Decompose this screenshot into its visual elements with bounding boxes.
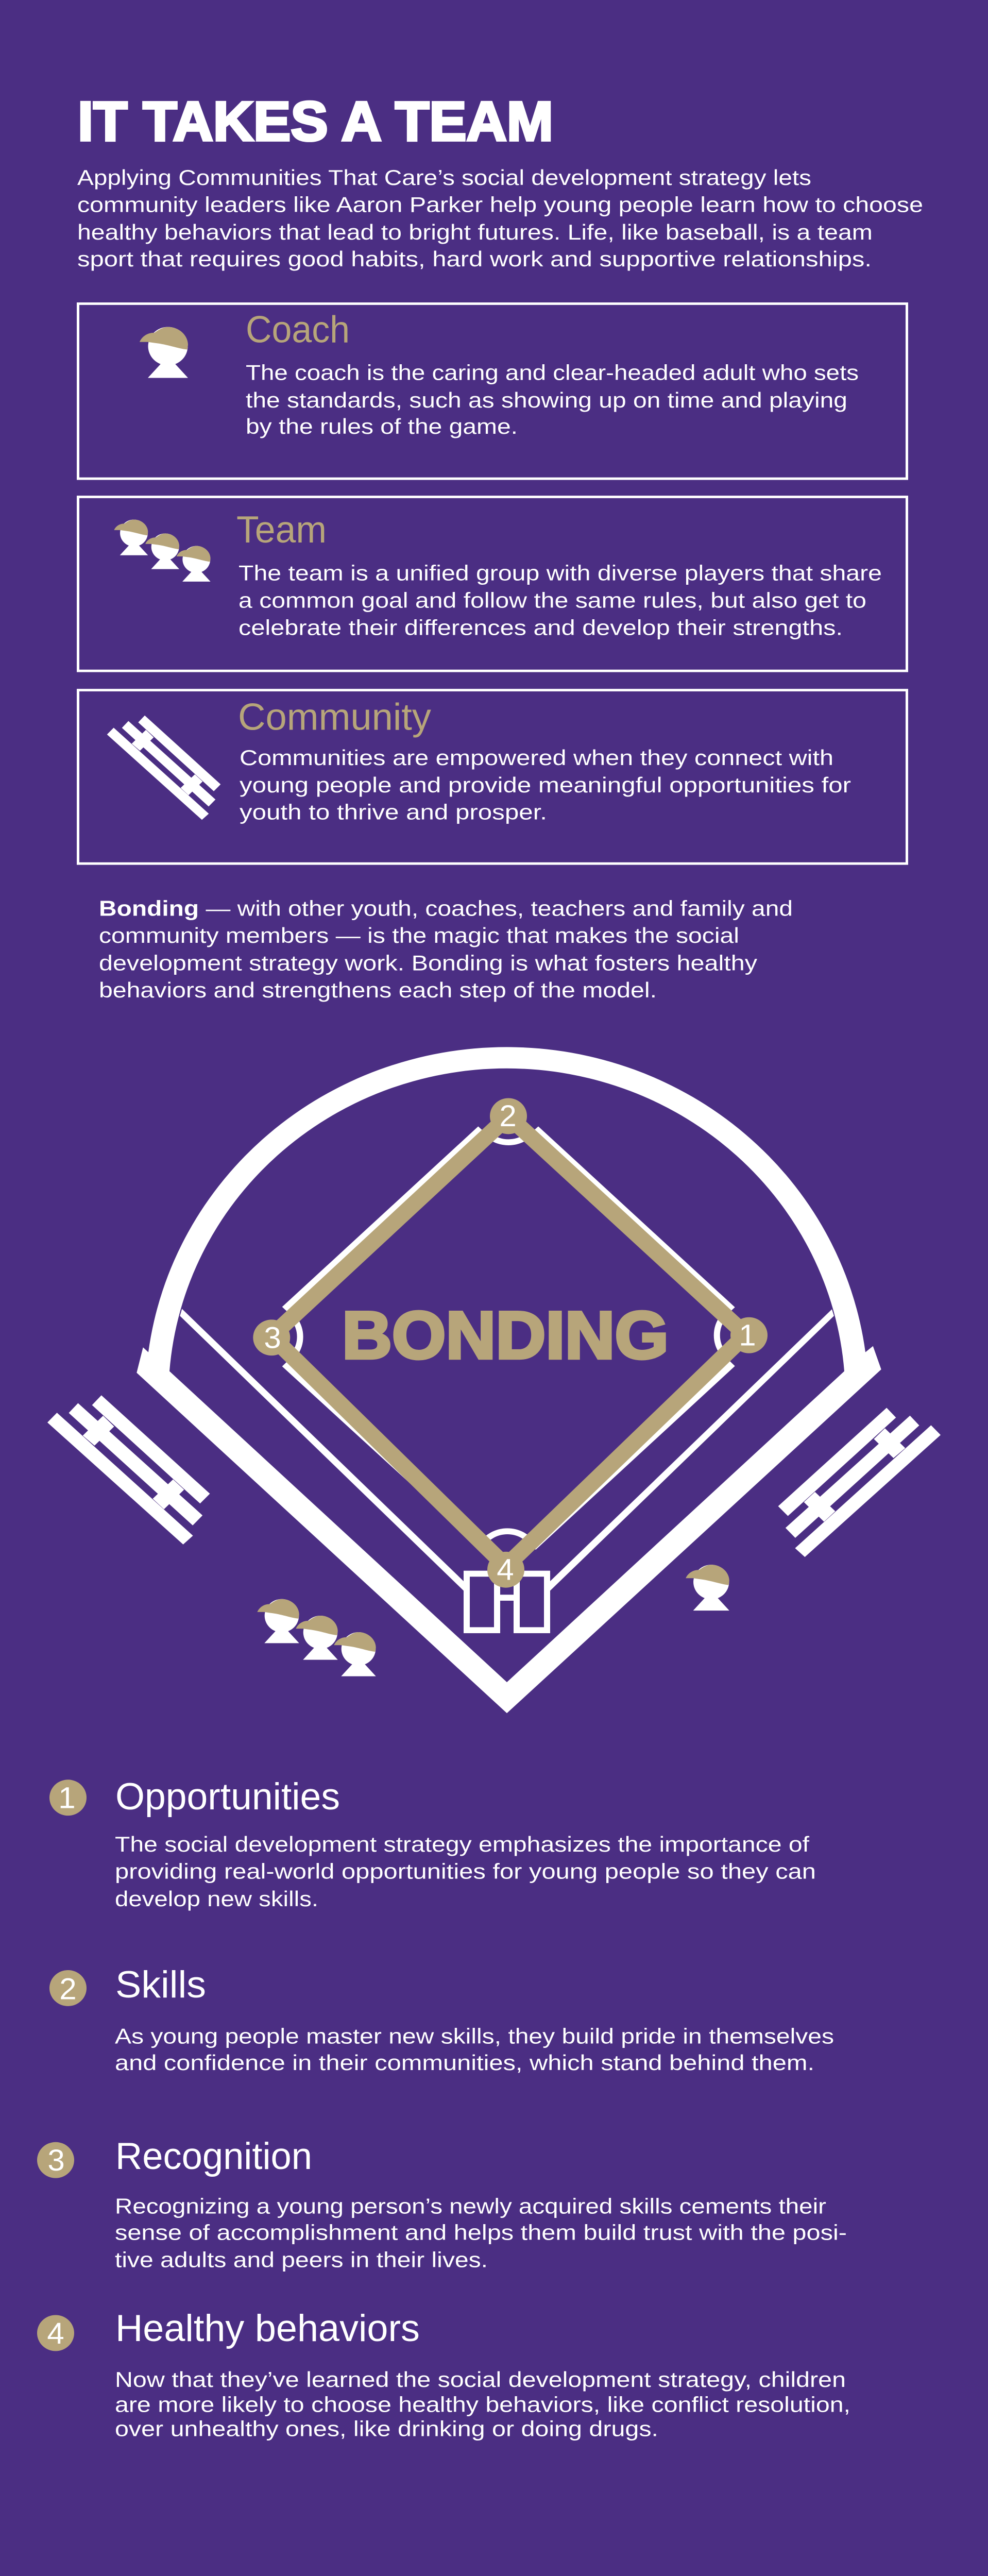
team description: The team is a unified group with diverse players that share	[239, 561, 882, 585]
foul line: right	[550, 1309, 834, 1591]
skills description	[115, 2024, 834, 2075]
bonding label: BONDING	[342, 1297, 669, 1372]
number badge 4: 4	[47, 2316, 64, 2350]
skills description: and confidence in their communities, which stand behind them.	[115, 2051, 814, 2075]
title: IT TAKES A TEAM	[78, 91, 553, 152]
number badge 1: 1	[58, 1781, 76, 1815]
tan diamond	[271, 1116, 746, 1566]
heading: coach: Coach	[246, 308, 350, 350]
coach description	[246, 361, 859, 438]
home plate batter boxes	[467, 1571, 547, 1630]
coach description: by the rules of the game.	[246, 415, 518, 438]
field outline	[137, 1047, 881, 1713]
heading: healthy behaviors: Healthy behaviors	[115, 2307, 420, 2349]
opportunities description: providing real-world opportunities for young people so they can	[115, 1859, 816, 1883]
bonding text block: Bonding — with other youth, coaches, teachers and family and	[99, 896, 793, 920]
base 2 marker	[490, 1098, 527, 1134]
step 4: healthy behaviors	[37, 2307, 850, 2441]
panel: team	[78, 497, 907, 671]
community description	[240, 746, 851, 824]
recognition description: sense of accomplishment and helps them build trust with the posi-	[115, 2221, 847, 2244]
opportunities description: The social development strategy emphasizes the importance of	[115, 1833, 809, 1856]
recognition description: Recognizing a young person’s newly acquired skills cements their	[115, 2194, 826, 2218]
community description: youth to thrive and prosper.	[240, 800, 547, 824]
icon: team of three	[114, 519, 211, 582]
healthy behaviors description: over unhealthy ones, like drinking or doing drugs.	[115, 2417, 658, 2441]
healthy behaviors description: Now that they’ve learned the social development strategy, children	[115, 2368, 846, 2392]
step 1: opportunities	[49, 1775, 816, 1911]
intro text block	[77, 166, 923, 271]
intro text block: community leaders like Aaron Parker help young people learn how to choose	[77, 193, 923, 216]
recognition description	[115, 2194, 847, 2272]
heading: skills: Skills	[115, 1963, 206, 2006]
number badge 3	[37, 2142, 74, 2178]
base 4 marker	[487, 1552, 524, 1588]
coach description: The coach is the caring and clear-headed adult who sets	[246, 361, 859, 384]
heading: opportunities: Opportunities	[115, 1775, 340, 1818]
base 3 marker: 3	[264, 1320, 281, 1354]
heading: community: Community	[238, 696, 432, 738]
heading: recognition: Recognition	[115, 2134, 312, 2177]
team description: a common goal and follow the same rules, but also get to	[239, 588, 866, 612]
bleachers: left	[47, 1395, 210, 1545]
base 1 marker	[730, 1317, 768, 1353]
coach description: the standards, such as showing up on time and playing	[246, 388, 847, 412]
icon: coach on field	[686, 1565, 729, 1611]
bleachers: right	[778, 1408, 941, 1557]
intro text block: healthy behaviors that lead to bright futures. Life, like baseball, is a team	[77, 220, 873, 244]
skills description: As young people master new skills, they build pride in themselves	[115, 2024, 834, 2048]
foul line: left	[180, 1309, 464, 1591]
base 1 marker: 1	[739, 1318, 756, 1352]
bonding text block: development strategy work. Bonding is what fosters healthy	[99, 951, 758, 975]
opportunities description	[115, 1833, 816, 1911]
recognition description: tive adults and peers in their lives.	[115, 2248, 488, 2272]
bonding text block	[99, 896, 793, 1002]
step 3: recognition	[37, 2134, 847, 2272]
bonding text block: community members — is the magic that makes the social	[99, 924, 739, 947]
community description: Communities are empowered when they connect with	[240, 746, 833, 770]
team description	[239, 561, 882, 639]
base arcs	[295, 1137, 723, 1545]
base 3 marker	[253, 1319, 290, 1355]
step 2: skills	[49, 1963, 834, 2075]
white base paths	[282, 1126, 735, 1550]
base 4 marker: 4	[497, 1552, 514, 1586]
heading: team: Team	[236, 508, 327, 551]
number badge 2	[49, 1970, 87, 2006]
community description: young people and provide meaningful opportunities for	[240, 773, 851, 797]
number badge 1	[49, 1780, 87, 1816]
icon: bleachers	[107, 716, 220, 820]
icon: team on field	[257, 1599, 376, 1676]
intro text block: Applying Communities That Care’s social development strategy lets	[77, 166, 811, 190]
intro text block: sport that requires good habits, hard work and supportive relationships.	[77, 247, 872, 271]
number badge 4	[37, 2315, 74, 2351]
healthy behaviors description	[115, 2368, 850, 2441]
icon: coach	[140, 327, 188, 378]
number badge 2: 2	[59, 1972, 77, 2006]
team description: celebrate their differences and develop their strengths.	[239, 616, 843, 639]
panel: community	[78, 690, 907, 863]
healthy behaviors description: are more likely to choose healthy behaviors, like conflict resolution,	[115, 2393, 850, 2417]
base 2 marker: 2	[499, 1099, 517, 1133]
bonding text block: behaviors and strengthens each step of the model.	[99, 978, 657, 1002]
panel: coach	[78, 303, 907, 479]
number badge 3: 3	[47, 2143, 65, 2177]
baseball field diagram	[47, 1047, 941, 1713]
opportunities description: develop new skills.	[115, 1887, 318, 1911]
